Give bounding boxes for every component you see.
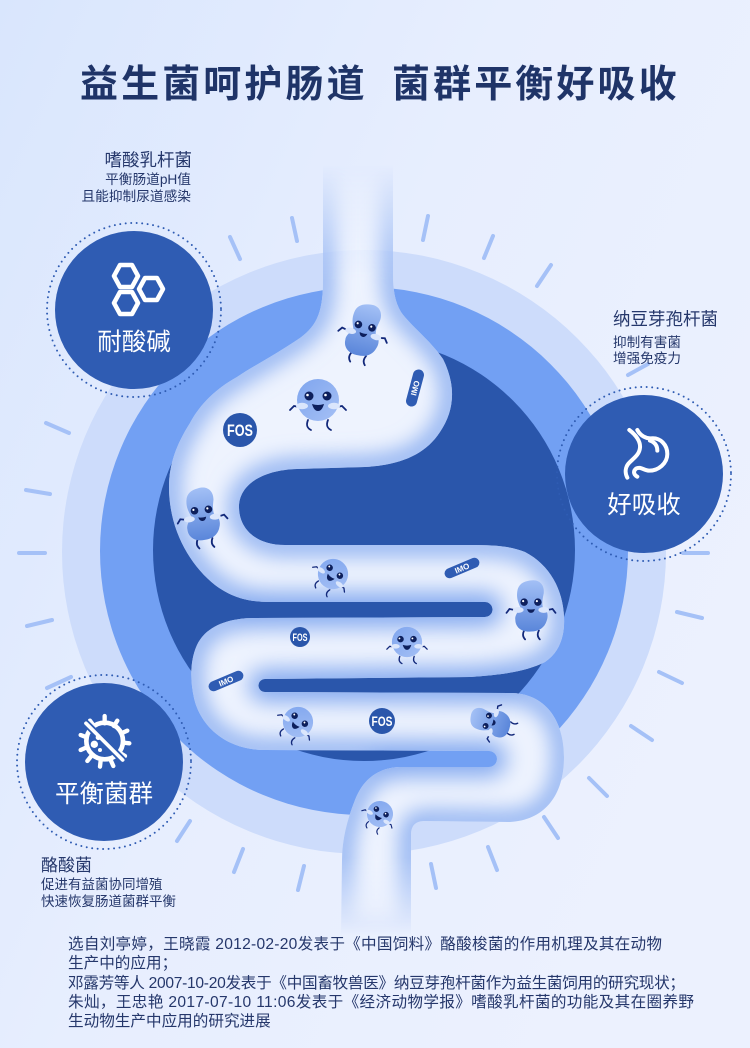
icon: hexagons xyxy=(114,265,163,314)
citation text xyxy=(68,935,694,1030)
FOS large xyxy=(223,413,257,447)
label: Lactobacillus acidophilus xyxy=(81,150,192,204)
label: Clostridium butyricum: 快速恢复肠道菌群平衡 xyxy=(41,893,176,909)
bacterium: upper stomach xyxy=(332,298,395,369)
label: Bacillus subtilis natto: 纳豆芽孢杆菌 xyxy=(613,309,718,329)
title: 益生菌呵护肠道 xyxy=(80,64,368,106)
IMO middle xyxy=(443,556,481,580)
intestine xyxy=(169,179,564,926)
icon: stomach xyxy=(626,430,667,478)
FOS markers xyxy=(223,413,395,734)
IMO pills xyxy=(207,368,481,693)
radial tick marks xyxy=(19,216,708,890)
bacteria characters xyxy=(174,298,556,839)
badge: acid resistance xyxy=(47,223,221,397)
citation text: 生产中的应用； xyxy=(68,953,177,972)
label: Bacillus subtilis natto: 增强免疫力 xyxy=(613,351,681,366)
citation text: 生动物生产中应用的研究进展 xyxy=(68,1011,271,1030)
title xyxy=(80,64,680,106)
icon: virus crossed out xyxy=(81,716,129,767)
bacterium: upper band xyxy=(304,550,358,603)
badge: balance flora: 平衡菌群 xyxy=(55,780,153,808)
badge: good absorption: 好吸收 xyxy=(607,491,681,519)
label: Clostridium butyricum xyxy=(41,856,176,909)
label: Bacillus subtilis natto: 抑制有害菌 xyxy=(613,335,681,350)
bacterium: round large xyxy=(290,379,346,430)
citation text: 朱灿，王忠艳 2017-07-10 11:06发表于《经济动物学报》嗜酸乳杆菌的功能及其在圈养野 xyxy=(68,993,694,1011)
IMO upper xyxy=(405,368,425,408)
IMO upper: IMO xyxy=(409,380,422,397)
badge: balance flora xyxy=(17,675,191,849)
title: 菌群平衡好吸收 xyxy=(392,64,680,106)
FOS large: FOS xyxy=(227,421,253,440)
IMO middle: IMO xyxy=(453,561,471,576)
FOS medium: FOS xyxy=(372,713,392,729)
label: Clostridium butyricum: 酪酸菌 xyxy=(41,856,92,875)
badge: acid resistance: 耐酸碱 xyxy=(97,328,171,356)
IMO left: IMO xyxy=(217,674,235,689)
bacterium: right bend xyxy=(506,580,556,639)
FOS small xyxy=(290,627,310,647)
FOS small: FOS xyxy=(292,632,308,644)
bacterium: lower left xyxy=(269,698,323,751)
label: Clostridium butyricum: 促进有益菌协同增殖 xyxy=(41,876,162,892)
bacterium: middle band xyxy=(387,627,427,664)
label: Lactobacillus acidophilus: 且能抑制尿道感染 xyxy=(81,188,191,204)
bacterium: lower tube xyxy=(356,794,402,839)
label: Lactobacillus acidophilus: 嗜酸乳杆菌 xyxy=(104,150,192,170)
label: Bacillus subtilis natto xyxy=(613,309,718,366)
concentric circles xyxy=(62,250,666,854)
citation text: 邓露芳等人 2007-10-20发表于《中国畜牧兽医》纳豆芽孢杆菌作为益生菌饲用的研究现状； xyxy=(68,974,685,992)
label: Lactobacillus acidophilus: 平衡肠道pH值 xyxy=(105,172,191,187)
citation text: 选自刘亭婷，王晓霞 2012-02-20发表于《中国饲料》酪酸梭菌的作用机理及其在动物 xyxy=(68,935,662,953)
bacterium: lower right xyxy=(465,697,522,748)
bacterium: left bend xyxy=(174,485,230,550)
FOS medium xyxy=(369,708,395,734)
IMO left xyxy=(207,669,245,693)
badge: good absorption xyxy=(557,387,731,561)
